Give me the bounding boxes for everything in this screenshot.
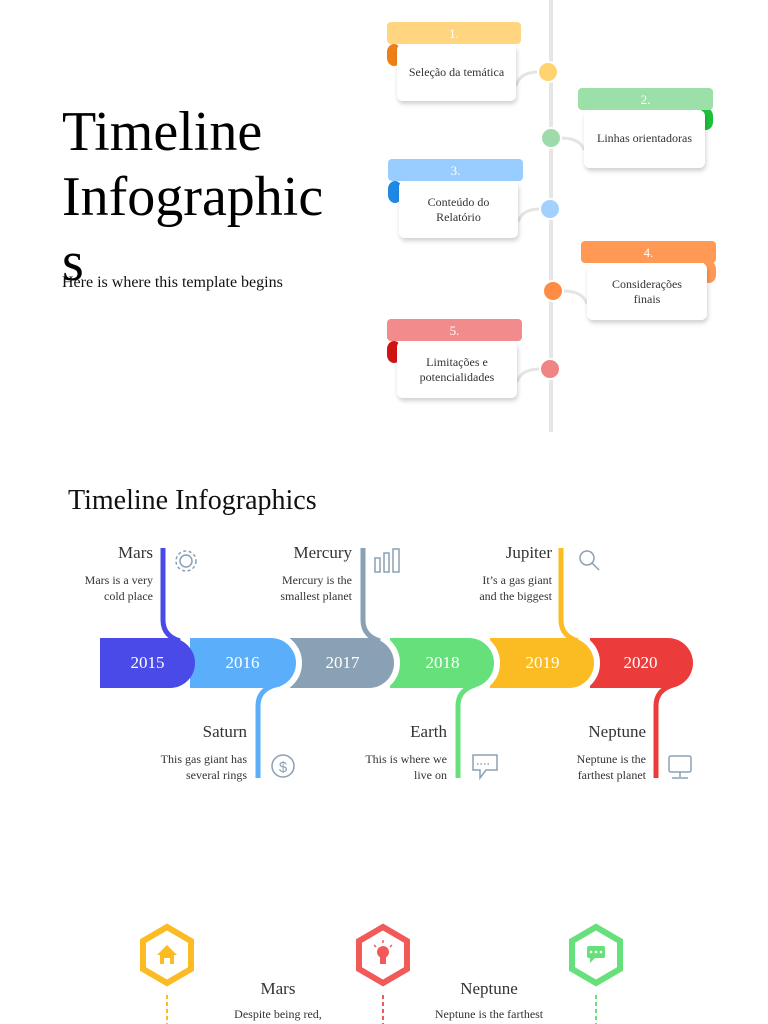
text: Mercury is the [282, 573, 352, 587]
text: Despite being red, [234, 1007, 322, 1021]
dashed lines [167, 995, 596, 1024]
text: several rings [186, 768, 247, 782]
main title [62, 101, 323, 293]
vertical timeline line [549, 0, 553, 432]
text: finais [634, 292, 660, 306]
connectors year timeline [163, 548, 673, 778]
text: Mars is a very [85, 573, 153, 587]
text: 5. [450, 323, 459, 338]
text: live on [414, 768, 447, 782]
text: Relatório [436, 210, 481, 224]
year labels: 2015 [130, 653, 164, 672]
text: 2020 [624, 653, 658, 672]
text: This gas giant has [161, 752, 247, 766]
text: 2. [641, 92, 650, 107]
card 4 [543, 241, 716, 320]
text: It’s a gas giant [482, 573, 552, 587]
planet texts top: Mars [118, 543, 153, 562]
text: Considerações [612, 277, 682, 291]
section title: Timeline Infographics [68, 485, 317, 516]
text: Jupiter [506, 543, 552, 562]
card 1 [387, 22, 558, 101]
text: Conteúdo do [428, 195, 489, 209]
text: Mercury [293, 543, 352, 562]
text: Neptune is the farthest [435, 1007, 543, 1021]
planet texts bottom: Saturn [203, 722, 247, 741]
text: and the biggest [479, 589, 552, 603]
text: This is where we [365, 752, 447, 766]
card 5 [387, 319, 560, 398]
text: potencialidades [420, 370, 494, 384]
text: 2017 [326, 653, 360, 672]
bottom texts: Mars [261, 979, 295, 998]
subtitle: Here is where this template begins [62, 274, 283, 291]
card 3 [388, 159, 560, 238]
text: Linhas orientadoras [597, 131, 692, 145]
main title: s [62, 231, 84, 293]
text: Earth [410, 722, 447, 741]
main title: Infographic [62, 166, 323, 228]
text: Neptune [460, 979, 518, 998]
text: farthest planet [578, 768, 646, 782]
text: smallest planet [280, 589, 352, 603]
text: Neptune is the [577, 752, 646, 766]
hex icons [157, 945, 177, 964]
year bar segments [100, 638, 693, 688]
main title: Timeline [62, 101, 262, 163]
card texts: 1. [449, 26, 459, 41]
text: 2019 [526, 653, 560, 672]
icons: $ [279, 759, 288, 776]
card 2 [541, 88, 713, 168]
text: cold place [104, 589, 153, 603]
text: 3. [451, 163, 460, 178]
icons [176, 549, 691, 778]
text: 4. [644, 245, 653, 260]
text: 2018 [426, 653, 460, 672]
hexagons [143, 927, 620, 983]
text: Seleção da temática [409, 65, 504, 79]
text: Neptune [588, 722, 646, 741]
text: Limitações e [426, 355, 488, 369]
text: 2016 [226, 653, 260, 672]
